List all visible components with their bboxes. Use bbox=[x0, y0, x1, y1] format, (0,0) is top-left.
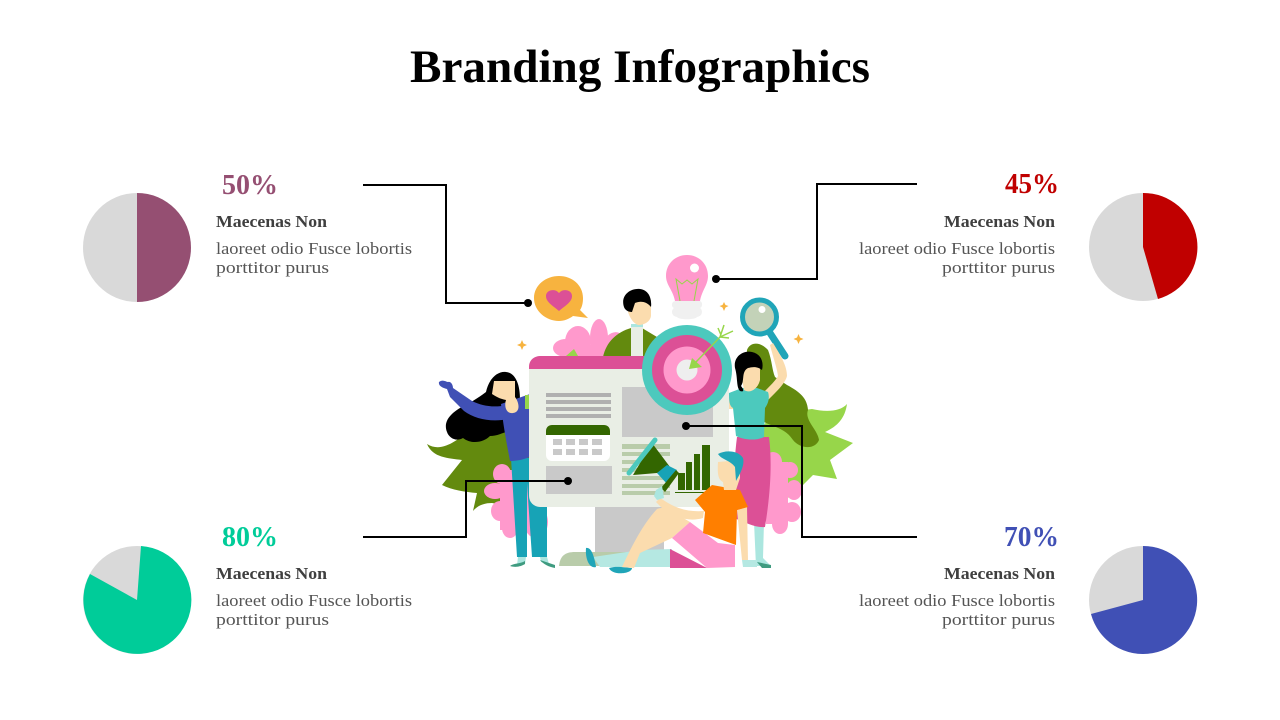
shirt bbox=[631, 325, 643, 357]
percentage: 70% bbox=[1004, 521, 1059, 553]
body text bbox=[216, 239, 412, 277]
back leg bbox=[593, 549, 672, 567]
board panel bbox=[529, 356, 729, 507]
body text: laoreet odio Fusce lobortis bbox=[859, 591, 1055, 610]
shoe bbox=[757, 562, 771, 568]
connector: top left bbox=[363, 185, 528, 303]
person: woman with long hair bbox=[439, 372, 555, 568]
plant: dark green left leaf bbox=[427, 400, 530, 511]
face bbox=[628, 300, 651, 325]
board stand bbox=[595, 505, 664, 561]
megaphone bbox=[629, 440, 679, 500]
connector: bottom left bbox=[363, 481, 568, 537]
heading: Maecenas Non bbox=[944, 212, 1055, 231]
percentage: 80% bbox=[222, 521, 278, 553]
plant: light green right leaf bbox=[755, 404, 853, 510]
left arm bbox=[729, 395, 733, 409]
pie chart 80% bbox=[83, 546, 191, 654]
pie chart 45% bbox=[1089, 193, 1197, 301]
green leaf peek bbox=[525, 395, 530, 409]
heading: Maecenas Non bbox=[216, 212, 327, 231]
panel: bottom right 70% bbox=[859, 521, 1197, 654]
skirt bbox=[734, 437, 771, 527]
calendar bbox=[546, 425, 610, 461]
pie chart 50% bbox=[83, 193, 191, 302]
image placeholder lower bbox=[546, 466, 612, 494]
pie chart 70% bbox=[1089, 546, 1197, 654]
icon: magnifying glass bbox=[742, 300, 785, 356]
forearm bbox=[656, 498, 704, 520]
shorts dark bbox=[670, 549, 707, 568]
flower: pink behind board bbox=[553, 319, 628, 364]
body text bbox=[859, 591, 1055, 629]
icon: speech bubble with heart bbox=[534, 276, 588, 321]
flower: pink lower left bbox=[484, 464, 548, 538]
plant: dark green right leaf bbox=[745, 344, 819, 447]
flower: pink lower right bbox=[764, 452, 802, 534]
right arm bbox=[737, 507, 748, 560]
neck and face bbox=[718, 460, 740, 490]
shirt bbox=[695, 485, 748, 545]
connector: top right bbox=[716, 184, 917, 279]
body text: laoreet odio Fusce lobortis bbox=[216, 591, 412, 610]
panel: top left 50% bbox=[83, 169, 412, 302]
icon: light bulb bbox=[666, 255, 708, 319]
hand bbox=[742, 560, 757, 567]
hair bbox=[735, 352, 763, 391]
icon: target with arrow bbox=[642, 325, 733, 415]
person: man behind board bbox=[603, 289, 662, 357]
central illustration bbox=[427, 255, 853, 573]
title: Branding Infographics bbox=[410, 41, 870, 93]
icons: sparkles bbox=[517, 302, 804, 350]
board bbox=[529, 356, 729, 507]
top bbox=[729, 388, 769, 440]
text lines bbox=[546, 393, 611, 418]
back shoe bbox=[586, 548, 596, 567]
collar bbox=[631, 324, 643, 327]
face and hand bbox=[492, 381, 518, 413]
connector: bottom right bbox=[686, 426, 917, 537]
heading: Maecenas Non bbox=[944, 564, 1055, 583]
jacket bbox=[603, 328, 662, 357]
connector lines bbox=[363, 184, 917, 537]
front shoe bbox=[609, 567, 632, 573]
body text: porttitor purus bbox=[216, 610, 329, 629]
thigh bbox=[622, 508, 690, 568]
image placeholder bbox=[622, 387, 713, 437]
shoe soles bbox=[510, 560, 555, 568]
board header bbox=[529, 356, 729, 369]
arm raised bbox=[764, 343, 787, 400]
shoe uppers bbox=[517, 557, 549, 565]
body text: porttitor purus bbox=[216, 258, 329, 277]
face bbox=[740, 362, 760, 391]
arm bbox=[439, 381, 516, 420]
body text: laoreet odio Fusce lobortis bbox=[859, 239, 1055, 258]
panel: top right 45% bbox=[859, 168, 1197, 301]
body text: porttitor purus bbox=[942, 610, 1055, 629]
torso bbox=[501, 394, 530, 461]
board base bbox=[559, 552, 640, 566]
bar chart bbox=[675, 445, 710, 493]
legs bbox=[511, 458, 547, 557]
percentage: 50% bbox=[222, 169, 278, 201]
percentage: 45% bbox=[1005, 168, 1059, 200]
hair bbox=[623, 289, 651, 312]
shorts light bbox=[672, 522, 735, 568]
heading: Maecenas Non bbox=[216, 564, 327, 583]
body text: laoreet odio Fusce lobortis bbox=[216, 239, 412, 258]
hair bbox=[718, 451, 743, 481]
body text: porttitor purus bbox=[942, 258, 1055, 277]
leaf tip behind board bbox=[566, 349, 578, 356]
green text lines bbox=[622, 444, 670, 495]
leg bbox=[754, 522, 771, 566]
connector dots bbox=[524, 275, 720, 485]
body text bbox=[859, 239, 1055, 277]
person: woman with raised arm bbox=[729, 343, 787, 568]
body text bbox=[216, 591, 412, 629]
panel: bottom left 80% bbox=[83, 521, 412, 654]
person: seated man with megaphone bbox=[586, 440, 757, 573]
hair bbox=[446, 372, 520, 442]
